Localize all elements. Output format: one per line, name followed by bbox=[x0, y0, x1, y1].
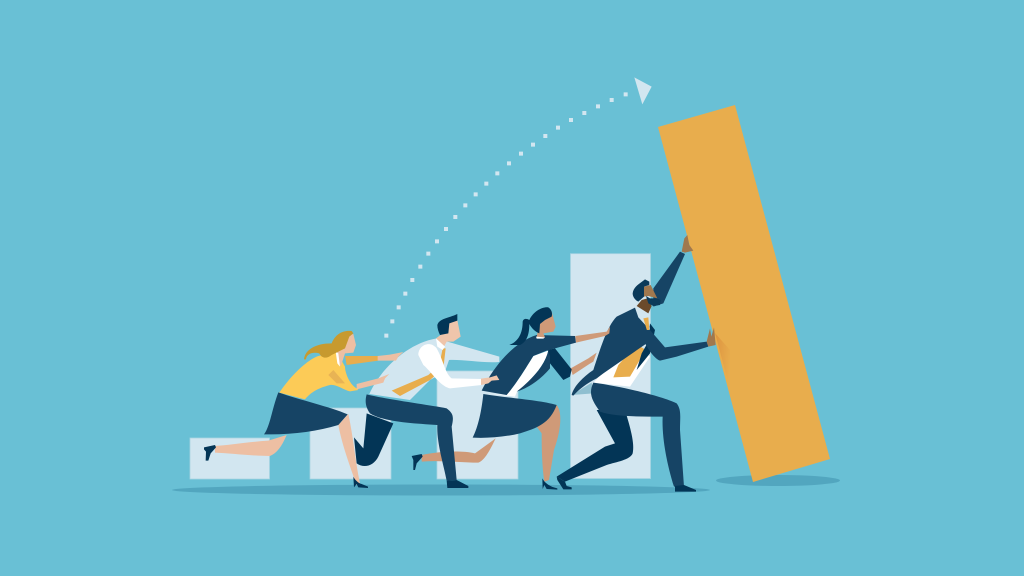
dotted growth arrow bbox=[384, 77, 652, 338]
woman in yellow bbox=[204, 331, 403, 488]
falling orange bar bbox=[658, 105, 830, 482]
bar shadow bbox=[716, 475, 840, 486]
man in white shirt bbox=[354, 314, 499, 488]
ground shadow bbox=[172, 484, 710, 496]
woman in navy jacket bbox=[412, 307, 610, 490]
bar chart bbox=[190, 254, 650, 479]
man in navy suit bbox=[557, 235, 716, 492]
